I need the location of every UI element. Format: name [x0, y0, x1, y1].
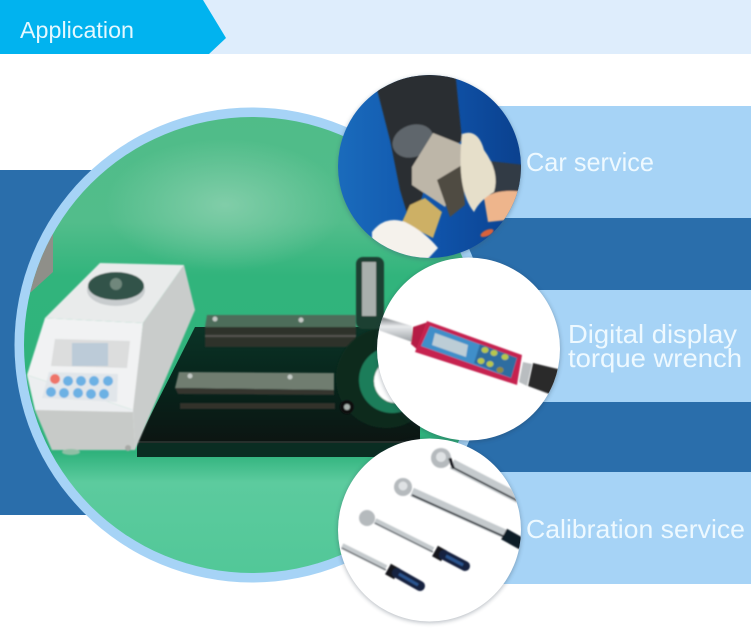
front face [27, 318, 143, 410]
light blue band: car service [480, 106, 751, 218]
right fixture [338, 256, 411, 428]
top face [45, 263, 184, 323]
upper rail [205, 315, 356, 347]
wrench body [415, 321, 522, 385]
keypad [42, 372, 118, 402]
dark blue right band [400, 218, 751, 472]
circle: digital torque wrench photo [376, 258, 570, 442]
lower rail [175, 372, 335, 409]
light blue band: digital display [520, 290, 751, 402]
display panel [51, 339, 130, 368]
instrument body [27, 263, 195, 455]
wrench 3 [359, 510, 465, 566]
label: digital display torque wrench: Digital display [568, 319, 737, 349]
wrench 1 [431, 448, 520, 502]
red end cap [411, 322, 428, 352]
grip [527, 362, 558, 394]
header banner [0, 0, 751, 54]
brass adapter [402, 198, 442, 238]
grey tool head [412, 133, 463, 207]
gloved hand [460, 133, 496, 212]
wrench 4 [342, 546, 420, 586]
white glove [372, 220, 438, 262]
connector [392, 124, 433, 158]
label: digital display torque wrench: torque wrench [568, 343, 742, 373]
label: car service: Car service [526, 147, 654, 177]
foot [62, 449, 80, 455]
dark blue side band [0, 170, 120, 515]
orange spot [480, 228, 494, 238]
header tab [0, 0, 226, 54]
large circle ring [14, 108, 490, 582]
wrench 2 [394, 478, 522, 544]
label: digital display torque wrench [568, 319, 742, 373]
turntable [86, 286, 146, 306]
buttons [482, 347, 488, 353]
base plate [137, 327, 420, 442]
label: calibration service: Calibration service [526, 514, 745, 544]
light blue band: calibration [480, 472, 751, 584]
side face [128, 265, 195, 450]
wrench shaft [378, 316, 412, 342]
dark column [376, 75, 462, 212]
arm [484, 191, 525, 222]
main photo: torque tester [24, 117, 463, 573]
circle: calibration wrenches photo [338, 438, 522, 623]
heading: Application [20, 17, 134, 43]
circle: car service photo [330, 70, 530, 265]
collar [519, 362, 532, 386]
backdrop corner object [30, 234, 53, 292]
